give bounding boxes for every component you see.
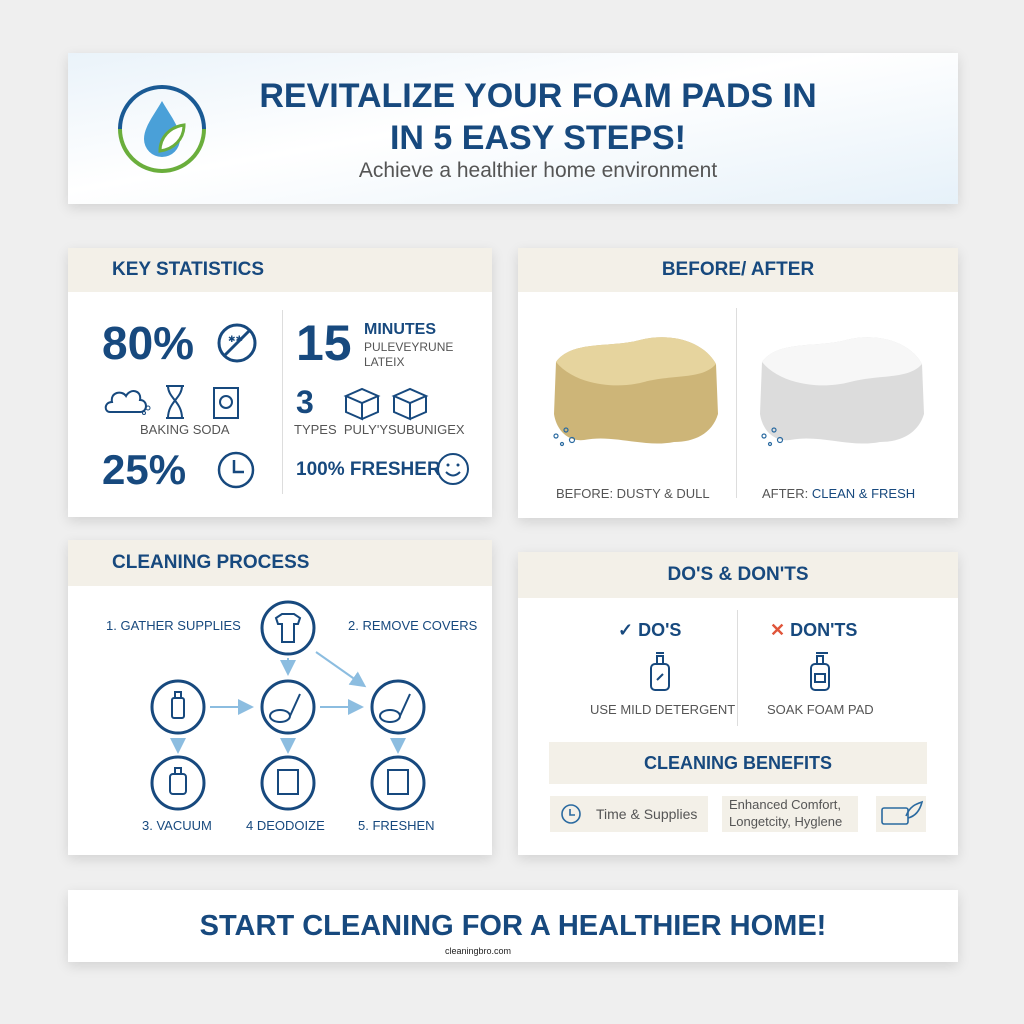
panel: dos and donts [518, 552, 958, 855]
icon: water drop leaf logo [118, 85, 206, 173]
panel: dos and donts: SOAK FOAM PAD [767, 702, 874, 717]
icons: cloud hourglass box [104, 385, 239, 419]
panel: key statistics: BAKING SODA [140, 422, 230, 437]
do's column: ✓ DO'S [618, 620, 681, 640]
panel: cleaning process: 1. GATHER SUPPLIES [106, 618, 241, 633]
panel: key statistics [68, 248, 492, 517]
footer banner [68, 890, 958, 962]
panel: before/after [518, 248, 958, 518]
benefit: time & supplies: Time & Supplies [596, 806, 697, 822]
header panel [68, 53, 958, 204]
title: REVITALIZE YOUR FOAM PADS IN [259, 77, 817, 115]
stat 25%: 25% [102, 446, 186, 493]
heading: cleaning process [68, 540, 492, 586]
heading: key statistics [68, 248, 492, 292]
panel: cleaning process: 2. REMOVE COVERS [348, 618, 477, 633]
footer url: cleaningbro.com [445, 946, 511, 956]
icon: no germs: ✱✱ [228, 334, 243, 344]
panel: key statistics: LATEIX [364, 355, 404, 369]
stat 80%: 80% [102, 317, 194, 369]
benefit: comfort [722, 796, 858, 832]
heading: dos & don'ts: DO'S & DON'TS [668, 564, 808, 585]
panel: key statistics: MINUTES [364, 321, 436, 338]
panel: cleaning process: 4 DEODOIZE [246, 818, 325, 833]
icon: no germs [218, 324, 256, 362]
title: IN 5 EASY STEPS! [390, 119, 686, 157]
heading: cleaning process: CLEANING PROCESS [112, 552, 309, 573]
benefit: comfort: Longetcity, Hyglene [729, 814, 842, 829]
heading: dos & don'ts [518, 552, 958, 598]
benefit: time & supplies [550, 796, 708, 832]
panel: cleaning process: 3. VACUUM [142, 818, 212, 833]
icon: pillow leaf [876, 796, 926, 832]
stat 15 minutes: 15 [296, 315, 352, 371]
image: dusty sponge [553, 337, 718, 446]
icon: clock [218, 452, 254, 488]
cleaning benefits heading [549, 742, 927, 784]
panel: key statistics: TYPES PULY'YSUBUNIGEX [294, 422, 465, 437]
stat 3 types with cubes: 3 [296, 384, 314, 420]
subtitle: Achieve a healthier home environment [359, 159, 717, 182]
panel: cleaning process [68, 540, 492, 855]
panel: before/after: AFTER: CLEAN & FRESH [762, 486, 915, 501]
title [259, 77, 817, 157]
heading: before/after: BEFORE/ AFTER [662, 259, 814, 280]
benefit: comfort: Enhanced Comfort, [729, 797, 841, 812]
panel: before/after: BEFORE: DUSTY & DULL [556, 486, 710, 501]
heading: before/after [518, 248, 958, 292]
image: clean sponge [760, 337, 924, 446]
flow diagram [150, 600, 426, 810]
stat 100% fresher: 100% FRESHER [296, 459, 441, 480]
panel: dos and donts: USE MILD DETERGENT [590, 702, 735, 717]
don'ts column: ✕ DON'TS [770, 620, 857, 640]
heading: key statistics: KEY STATISTICS [112, 259, 264, 280]
panel: cleaning process: 5. FRESHEN [358, 818, 435, 833]
footer title: START CLEANING FOR A HEALTHIER HOME! [200, 910, 826, 942]
panel: key statistics: PULEVEYRUNE [364, 340, 453, 354]
cleaning benefits heading: CLEANING BENEFITS [644, 752, 832, 772]
